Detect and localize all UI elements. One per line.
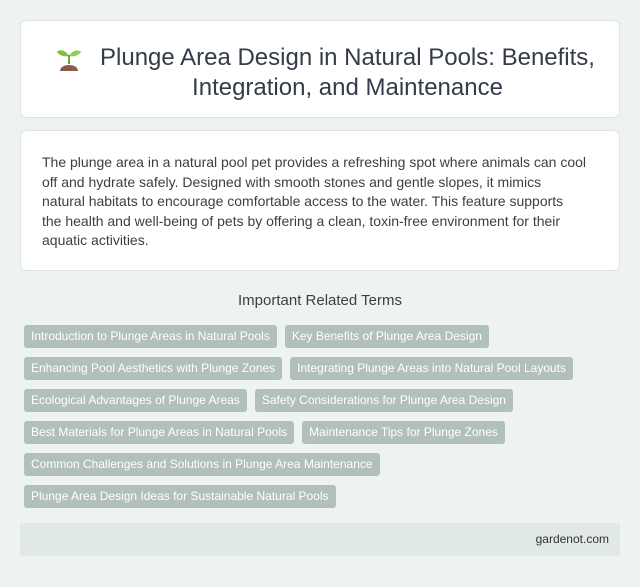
tags list: Key Benefits of Plunge Area Design	[292, 329, 482, 343]
tags list: Enhancing Pool Aesthetics with Plunge Zones	[31, 361, 275, 375]
description panel: the health and well-being of pets by offering a clean, toxin-free environment for their	[42, 212, 560, 228]
tags list: Introduction to Plunge Areas in Natural Pools	[31, 329, 270, 343]
tags list: Common Challenges and Solutions in Plunge Area Maintenance	[31, 457, 373, 471]
tags list	[24, 325, 573, 508]
description panel: natural habitats to encourage comfortable access to the water. This feature supports	[42, 193, 563, 209]
icon: seedling	[57, 50, 81, 71]
title card	[20, 20, 620, 118]
description panel	[20, 130, 620, 271]
tags list: Plunge Area Design Ideas for Sustainable Natural Pools	[31, 489, 329, 503]
description panel: off and hydrate safely. Designed with smooth stones and gentle slopes, it mimics	[42, 174, 541, 190]
footer	[20, 523, 620, 556]
tags list: Integrating Plunge Areas into Natural Pool Layouts	[297, 361, 566, 375]
tags list: Ecological Advantages of Plunge Areas	[31, 393, 240, 407]
tags list: Safety Considerations for Plunge Area Design	[262, 393, 506, 407]
footer: gardenot.com	[536, 532, 609, 546]
title: Plunge Area Design in Natural Pools: Benefits, Integration, and Maintenance	[100, 44, 595, 101]
tags list: Maintenance Tips for Plunge Zones	[309, 425, 498, 439]
heading: related terms: Important Related Terms	[238, 292, 402, 309]
description panel: The plunge area in a natural pool pet provides a refreshing spot where animals can cool	[42, 154, 586, 170]
description panel: aquatic activities.	[42, 232, 149, 248]
tags list: Best Materials for Plunge Areas in Natural Pools	[31, 425, 287, 439]
